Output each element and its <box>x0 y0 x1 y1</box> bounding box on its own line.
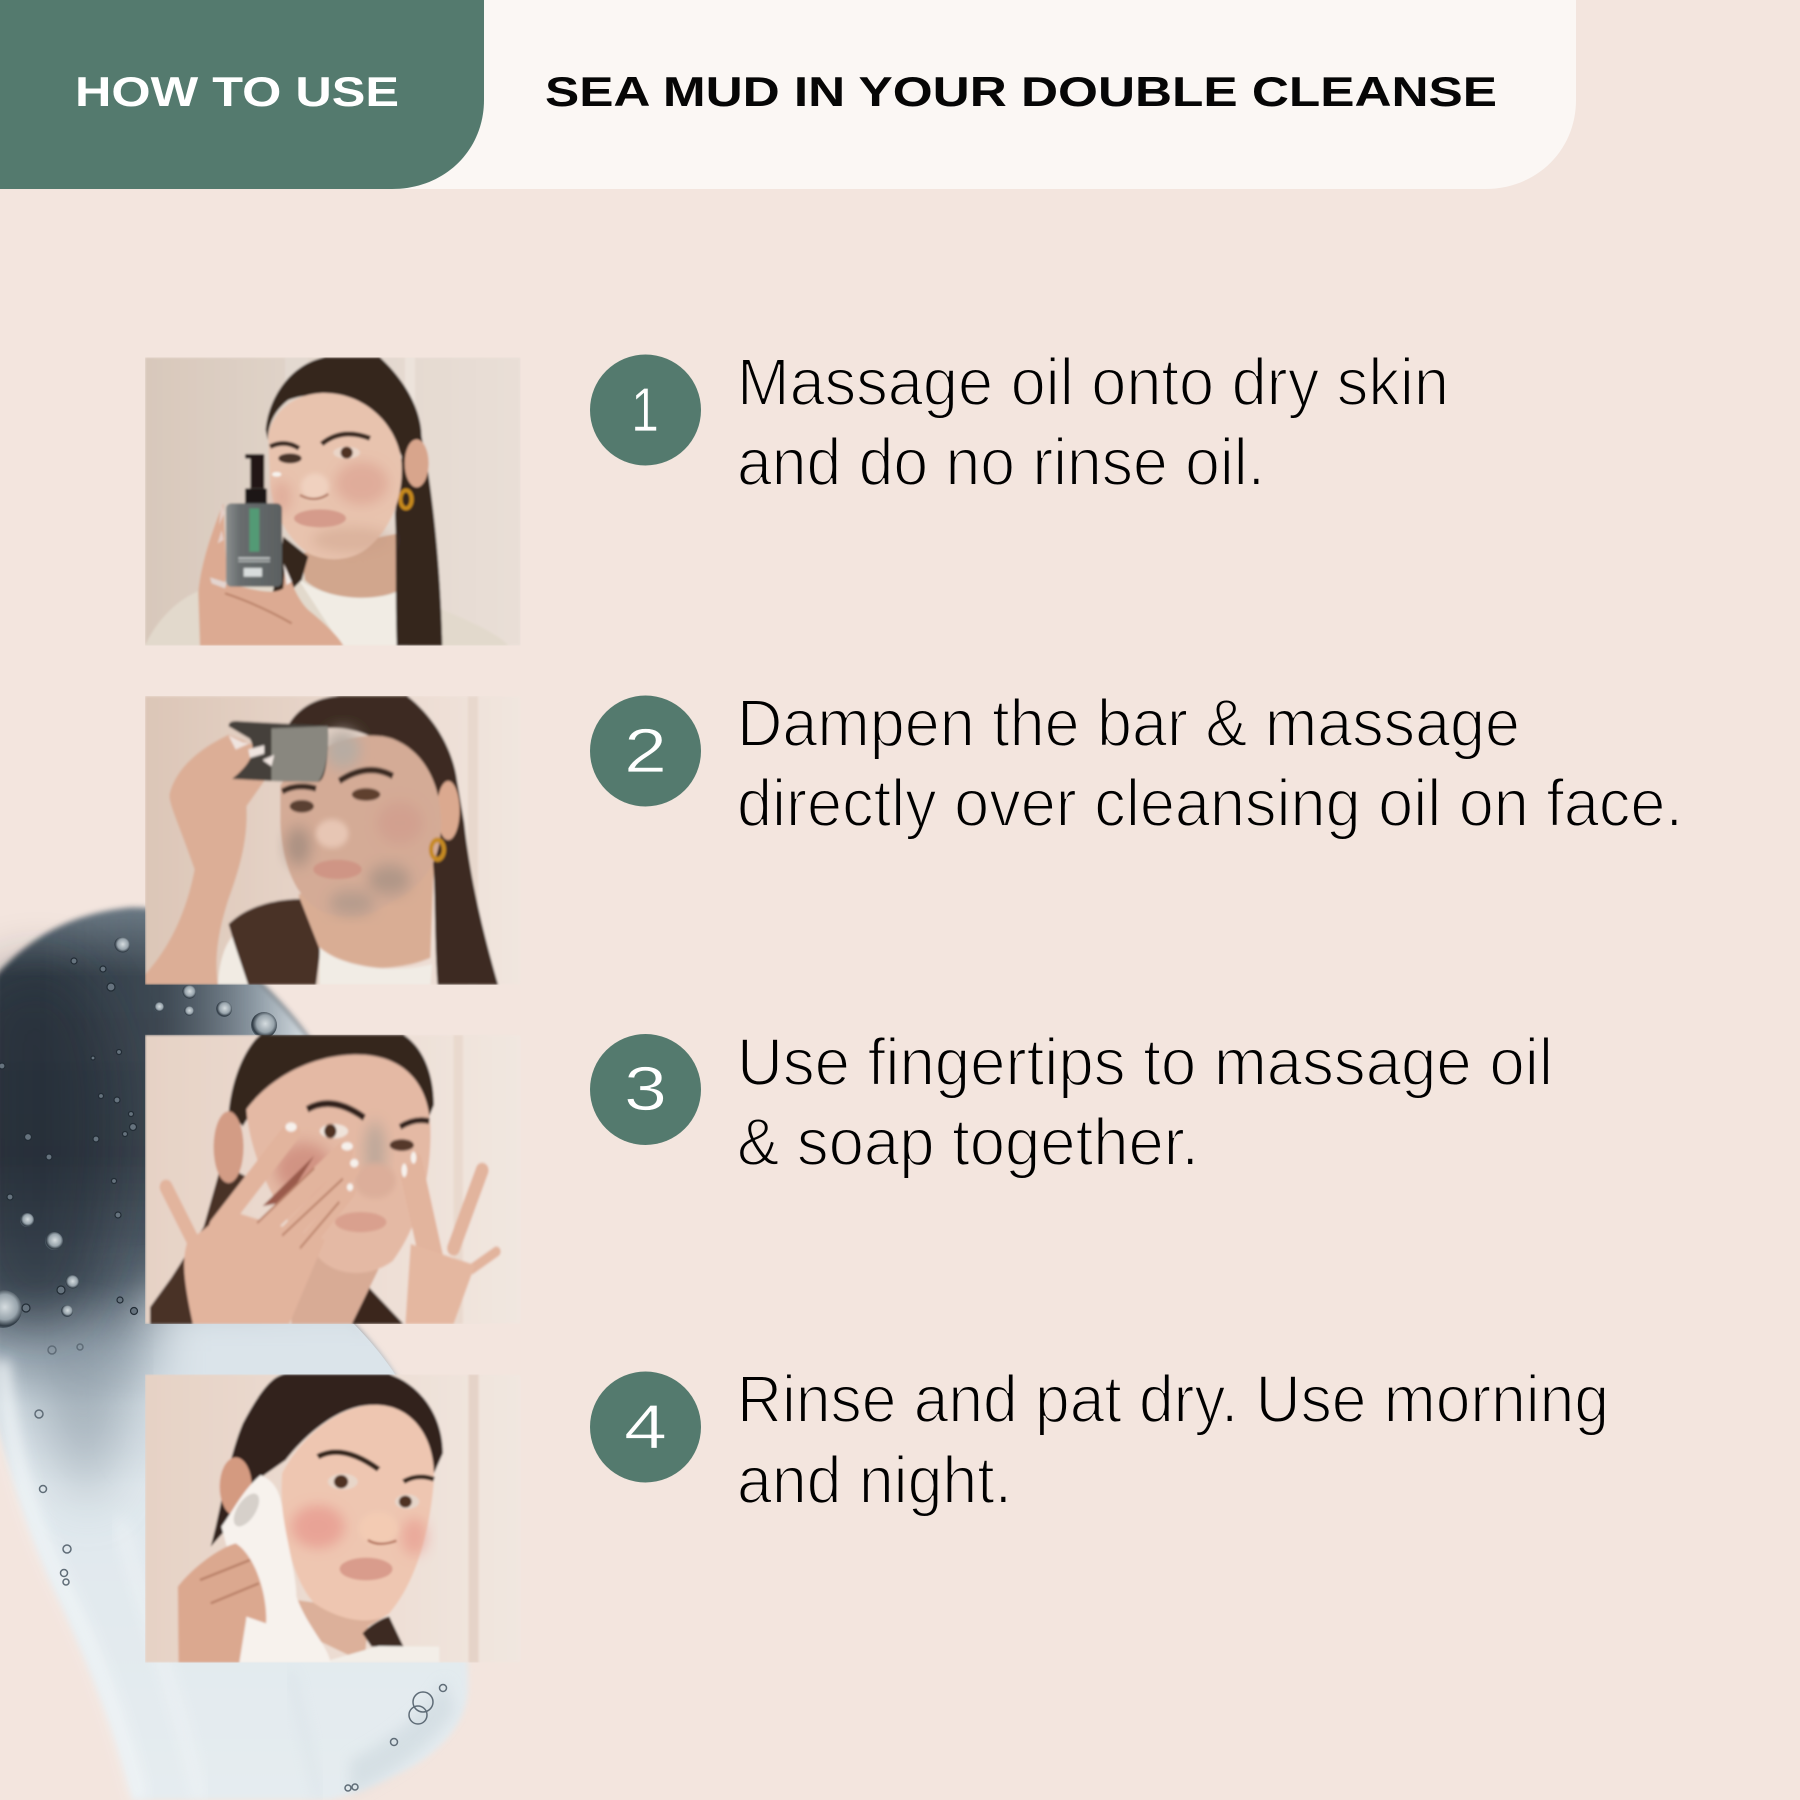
step 4 text: and night. <box>737 1443 1012 1518</box>
step 1 text: and do no rinse oil. <box>737 425 1265 500</box>
header bar <box>0 0 1576 189</box>
heading: how to use: HOW TO USE <box>75 68 399 115</box>
step 4 text: Rinse and pat dry. Use morning <box>737 1362 1609 1437</box>
step 2 text: directly over cleansing oil on face. <box>737 766 1683 841</box>
small droplets <box>0 958 138 1314</box>
step 2 text: Dampen the bar & massage <box>737 686 1520 761</box>
number badge 3: 3 <box>624 1055 667 1124</box>
number badge 2 <box>590 696 701 806</box>
step 2 <box>590 686 1683 841</box>
number badge 1: 1 <box>631 376 659 445</box>
step 1 <box>590 345 1449 500</box>
photo 2: applying the bar to the face <box>145 696 521 985</box>
large droplets <box>0 937 277 1328</box>
step 1 text <box>737 345 1449 500</box>
number badge 2: 2 <box>624 717 667 786</box>
step 4 text <box>737 1362 1609 1518</box>
header tab <box>0 0 484 189</box>
number badge 4 <box>590 1372 701 1482</box>
step 3 text <box>737 1025 1553 1180</box>
heading: sea mud: SEA MUD IN YOUR DOUBLE CLEANSE <box>545 68 1497 115</box>
step 2 text <box>737 686 1683 841</box>
step 3 text: & soap together. <box>737 1105 1199 1180</box>
step 3 text: Use fingertips to massage oil <box>737 1025 1553 1100</box>
cleanser smear <box>0 908 468 1800</box>
number badge 3 <box>590 1034 701 1145</box>
photo 1: woman holding cleansing oil bottle <box>145 357 521 646</box>
ring droplets <box>35 1344 446 1791</box>
photo 4: patting dry with towel <box>145 1374 479 1663</box>
number badge 4: 4 <box>624 1393 667 1462</box>
step 3 <box>590 1025 1553 1180</box>
photo 3: massaging with fingertips <box>145 1035 521 1324</box>
step 1 text: Massage oil onto dry skin <box>737 345 1449 420</box>
number badge 1 <box>590 354 701 466</box>
step 4 <box>590 1362 1609 1518</box>
